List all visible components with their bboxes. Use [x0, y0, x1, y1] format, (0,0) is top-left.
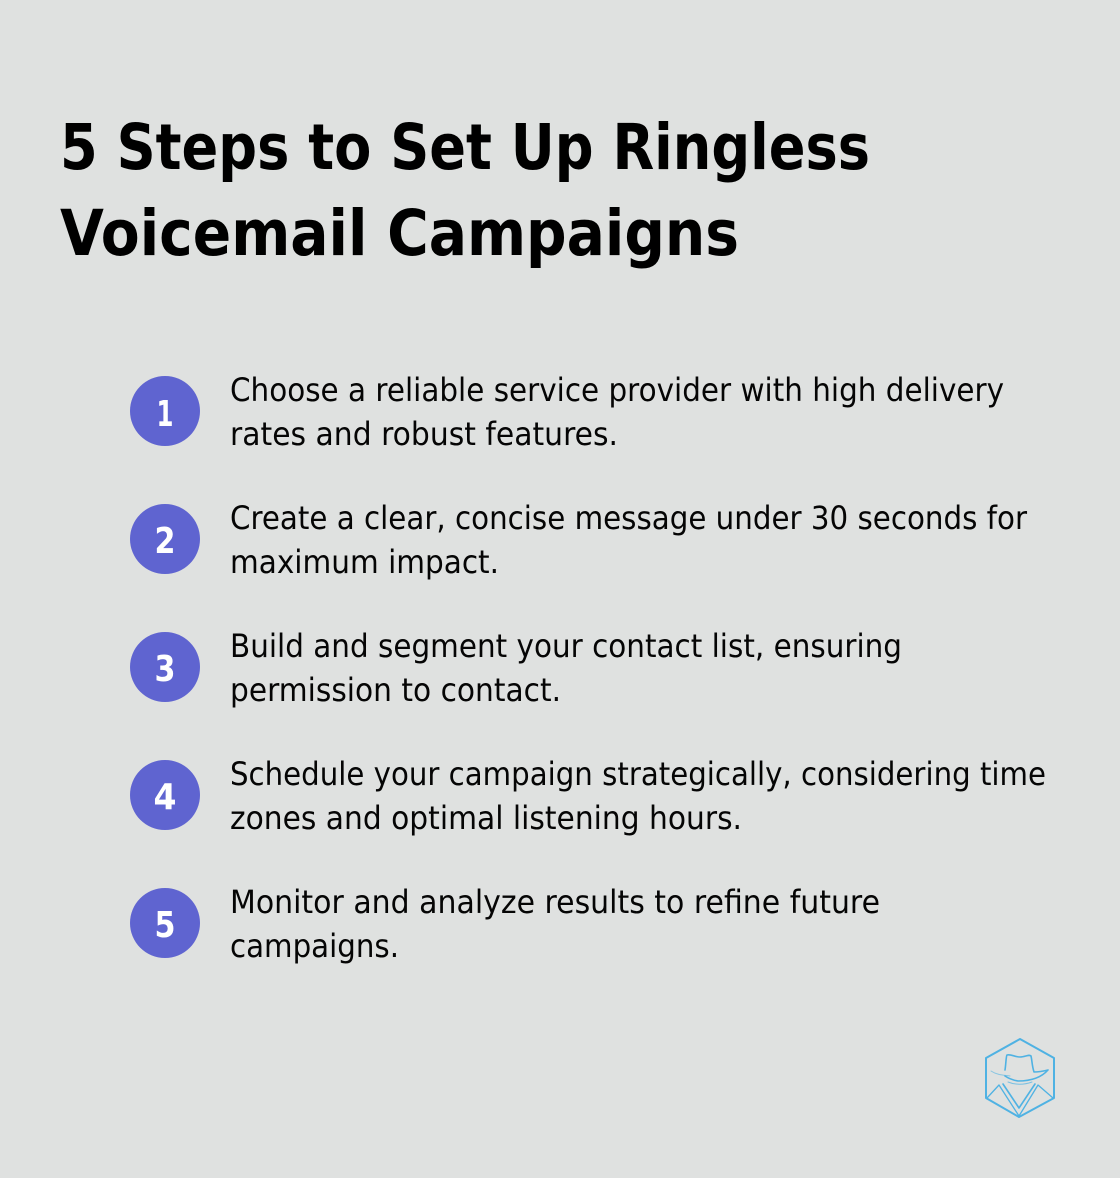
step 5 number badge	[130, 888, 200, 958]
step 5 text: campaigns.	[230, 927, 399, 965]
step 2 text: maximum impact.	[230, 543, 499, 581]
step 5 number badge: 5	[154, 905, 176, 946]
step 4 text: Schedule your campaign strategically, considering time	[230, 755, 1046, 793]
step 4	[130, 755, 1046, 837]
step 2 number badge	[130, 504, 200, 574]
step 3 number badge	[130, 632, 200, 702]
step 3 number badge: 3	[154, 649, 176, 690]
title	[60, 111, 870, 270]
step 4 text: zones and optimal listening hours.	[230, 799, 742, 837]
step 1 text	[230, 371, 1004, 453]
step 1 number badge: 1	[156, 394, 174, 435]
icon: spy logo hexagon	[986, 1039, 1054, 1117]
title: Voicemail Campaigns	[60, 197, 739, 270]
step 5 text: Monitor and analyze results to refine future	[230, 883, 880, 921]
step 1	[130, 371, 1004, 453]
step 5	[130, 883, 880, 965]
step 2	[130, 499, 1028, 581]
step 4 text	[230, 755, 1046, 837]
step 3	[130, 627, 902, 709]
title: 5 Steps to Set Up Ringless	[60, 111, 870, 184]
step 3 text: permission to contact.	[230, 671, 561, 709]
step 5 text	[230, 883, 880, 965]
step 1 text: Choose a reliable service provider with high delivery	[230, 371, 1004, 409]
step 2 number badge: 2	[154, 521, 176, 562]
step 2 text	[230, 499, 1028, 581]
step 3 text	[230, 627, 902, 709]
step 1 number badge	[130, 376, 200, 446]
step 2 text: Create a clear, concise message under 30 seconds for	[230, 499, 1028, 537]
step 3 text: Build and segment your contact list, ensuring	[230, 627, 902, 665]
step 4 number badge	[130, 760, 200, 830]
step 4 number badge: 4	[154, 777, 176, 818]
step 1 text: rates and robust features.	[230, 415, 618, 453]
